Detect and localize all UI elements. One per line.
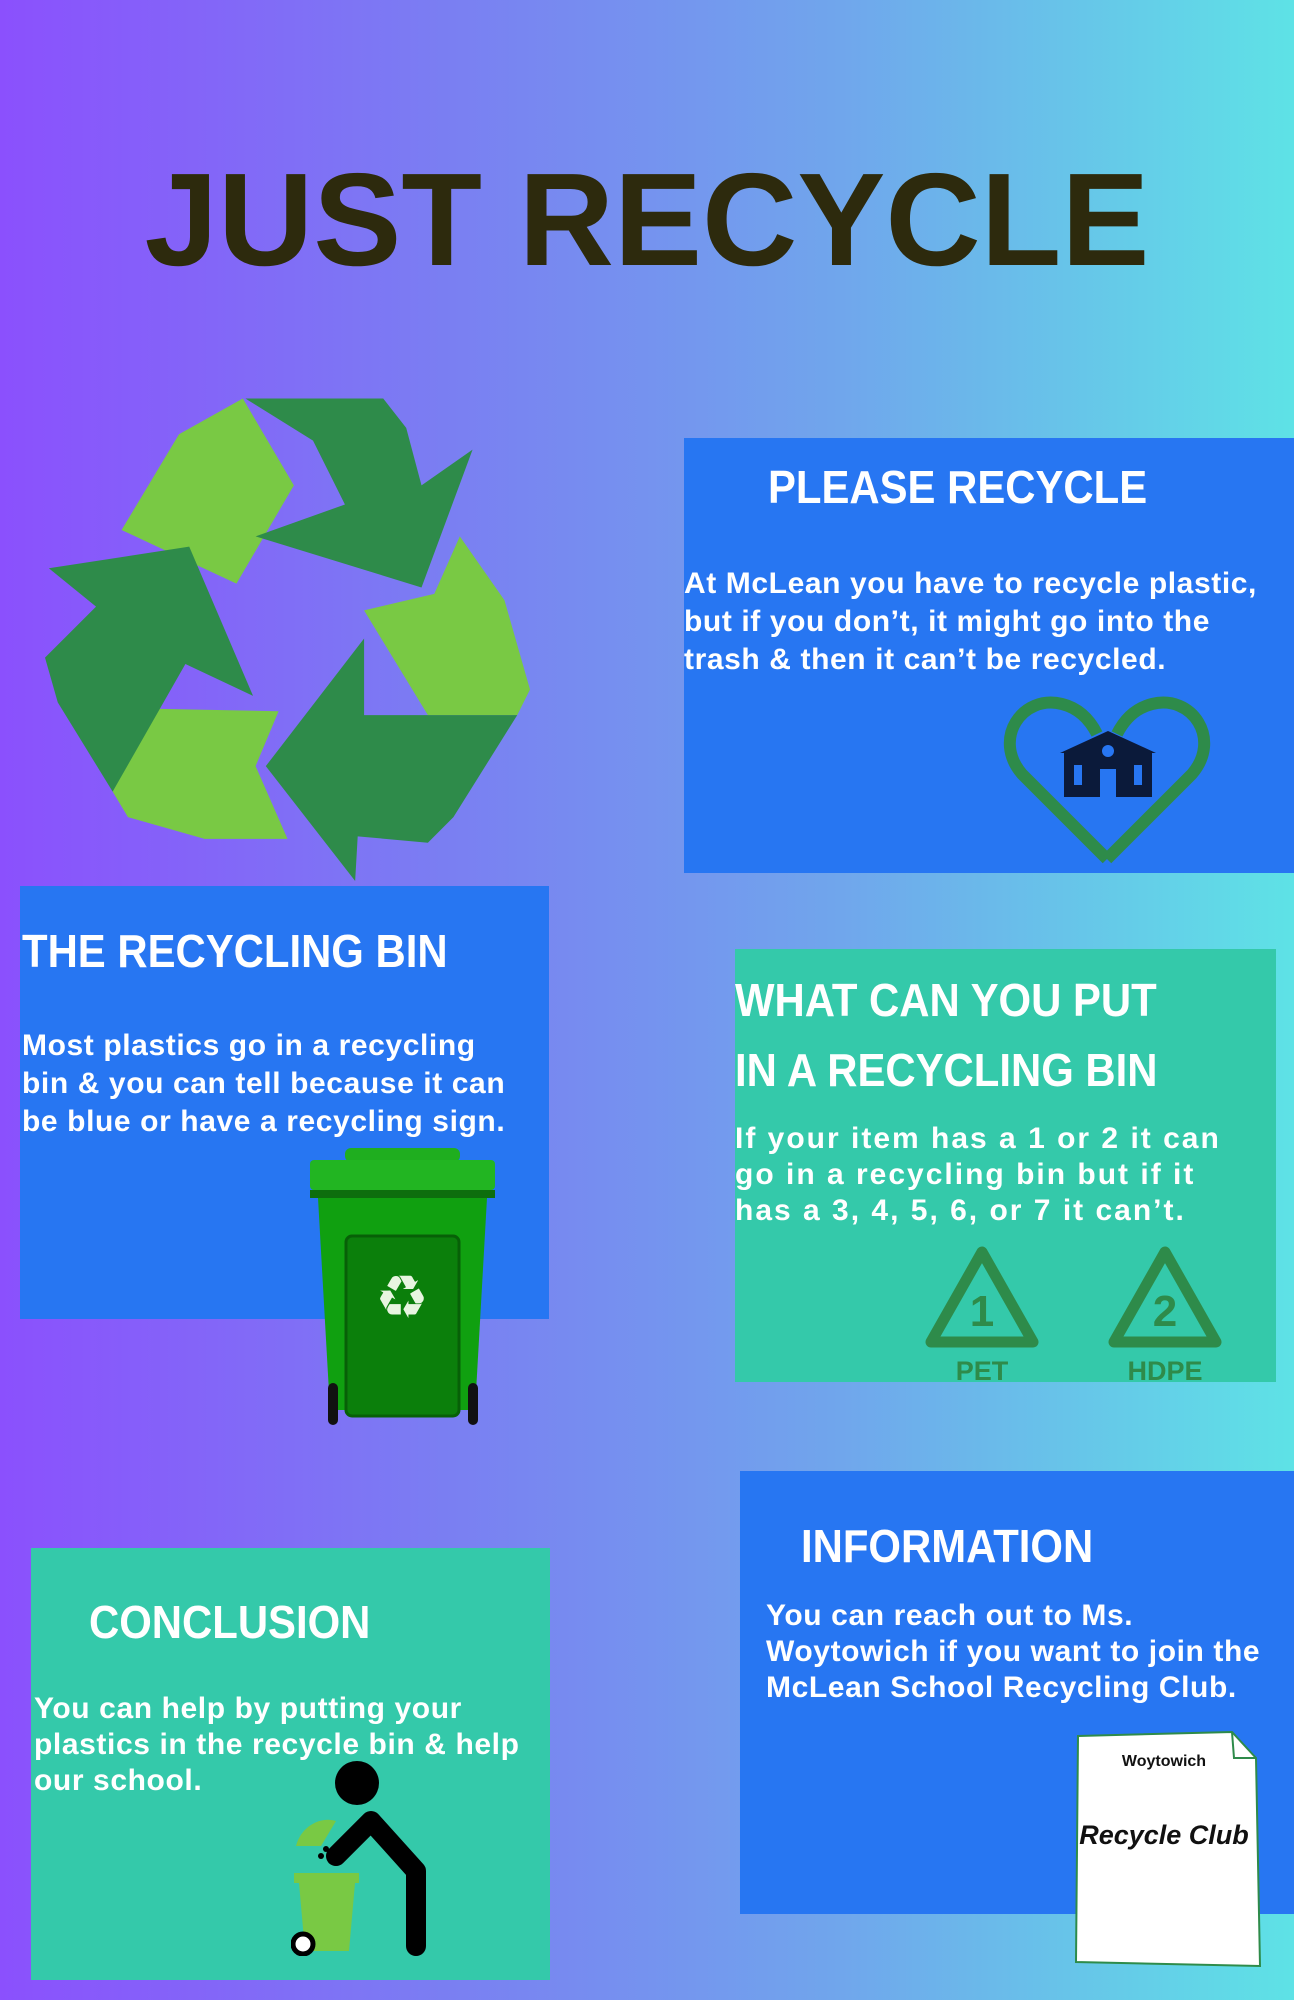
icon: HDPE 2: 2 (1153, 1287, 1177, 1336)
icon: paper note (1075, 1731, 1261, 1967)
text block (22, 1029, 505, 1138)
panel: information (740, 1471, 1294, 1914)
text block: trash & then it can’t be recycled. (684, 643, 1166, 676)
icon: paper note: Recycle Club (1079, 1820, 1249, 1850)
icon: paper note: Woytowich (1122, 1753, 1206, 1770)
text block: You can reach out to Ms. (766, 1599, 1133, 1632)
heading: PLEASE RECYCLE (768, 461, 1147, 513)
panel: the recycling bin (20, 886, 549, 1319)
heading: INFORMATION (801, 1520, 1093, 1572)
text block: At McLean you have to recycle plastic, (684, 567, 1257, 600)
text block: be blue or have a recycling sign. (22, 1105, 505, 1138)
panel: please recycle (684, 438, 1294, 873)
icon: PET 1 (926, 1246, 1038, 1385)
icon: person throwing trash (291, 1761, 426, 1956)
text block: If your item has a 1 or 2 it can (735, 1122, 1221, 1155)
text block: McLean School Recycling Club. (766, 1671, 1237, 1704)
text block: but if you don’t, it might go into the (684, 605, 1210, 638)
panel: conclusion (31, 1548, 550, 1980)
heading: THE RECYCLING BIN (22, 925, 448, 977)
icon: PET 1: 1 (970, 1287, 994, 1336)
text block: has a 3, 4, 5, 6, or 7 it can’t. (735, 1194, 1186, 1227)
text block: plastics in the recycle bin & help (34, 1728, 520, 1761)
title: JUST RECYCLE (145, 146, 1149, 293)
icon: green wheelie bin: ♻ (375, 1263, 429, 1333)
icon: heart with school (1004, 696, 1210, 864)
text block: bin & you can tell because it can (22, 1067, 505, 1100)
heading: CONCLUSION (89, 1596, 370, 1648)
text block (34, 1692, 520, 1797)
text block: Woytowich if you want to join the (766, 1635, 1260, 1668)
heading: IN A RECYCLING BIN (735, 1044, 1157, 1096)
text block (735, 1122, 1221, 1227)
icon: HDPE 2 (1108, 1246, 1222, 1385)
text block: our school. (34, 1764, 202, 1797)
heading (735, 974, 1157, 1096)
text block: Most plastics go in a recycling (22, 1029, 476, 1062)
text block (766, 1599, 1260, 1704)
heading: WHAT CAN YOU PUT (735, 974, 1157, 1026)
text block (684, 567, 1257, 676)
icon: recycling symbol (45, 398, 530, 881)
icon: green wheelie bin (310, 1148, 495, 1425)
panel: what can you put in a recycling bin (735, 949, 1276, 1382)
text block: You can help by putting your (34, 1692, 462, 1725)
text block: go in a recycling bin but if it (735, 1158, 1195, 1191)
